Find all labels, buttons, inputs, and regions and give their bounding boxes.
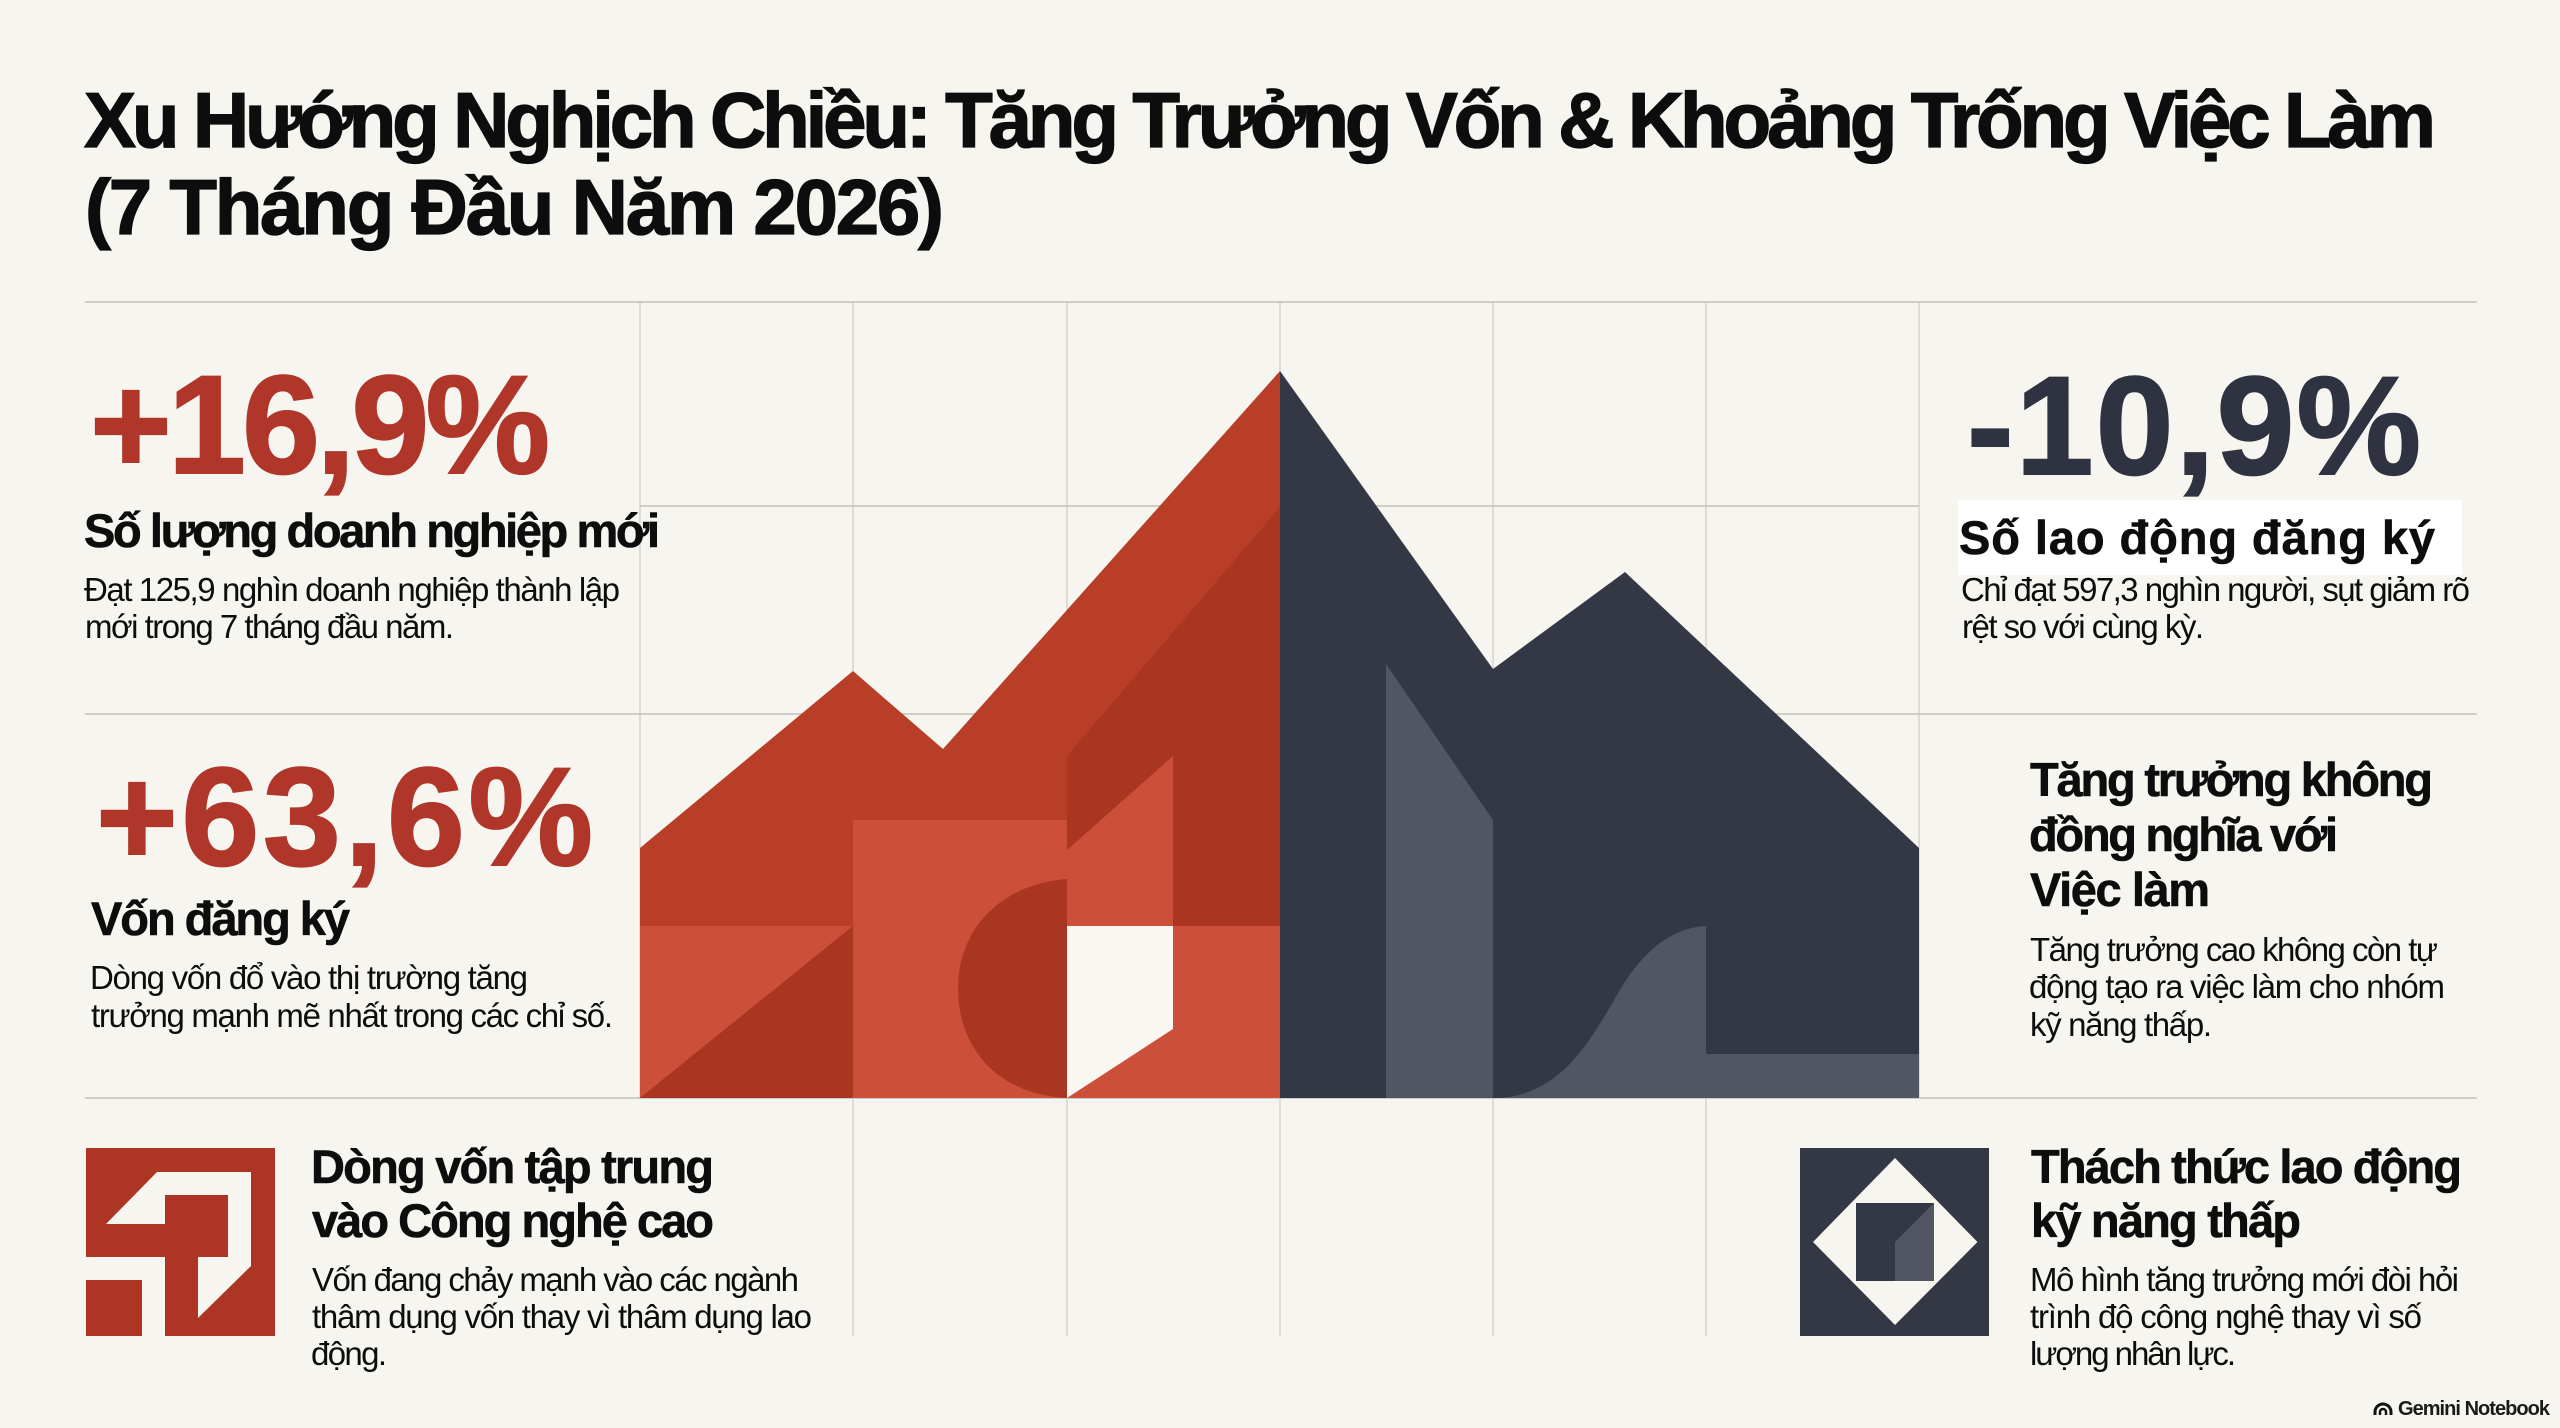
text: capital concentrated in high tech: Dòng vốn tập trung <box>311 1140 714 1193</box>
insight: growth without jobs: Tăng trưởng không <box>2030 753 2433 806</box>
text: capital concentrated in high tech: động. <box>311 1335 387 1372</box>
insight: growth without jobs: kỹ năng thấp. <box>2030 1006 2212 1043</box>
text: low-skill labour challenge: Mô hình tăng trưởng mới đòi hỏi <box>2030 1261 2459 1298</box>
stat: new enterprises: Số lượng doanh nghiệp mới <box>84 504 660 557</box>
stat: registered capital <box>90 738 613 1034</box>
title <box>84 76 2436 251</box>
stat: registered labour: Chỉ đạt 597,3 nghìn người, sụt giảm rõ <box>1961 571 2470 608</box>
text: capital concentrated in high tech <box>311 1140 812 1372</box>
stat: registered labour: rệt so với cùng kỳ. <box>1962 608 2204 645</box>
text: capital concentrated in high tech: vào Công nghệ cao <box>312 1194 714 1247</box>
central chart: mirrored mountain <box>640 371 1919 1098</box>
text: capital concentrated in high tech: thâm dụng vốn thay vì thâm dụng lao <box>312 1298 812 1335</box>
title: Xu Hướng Nghịch Chiều: Tăng Trưởng Vốn & Khoảng Trống Việc Làm <box>84 76 2436 164</box>
text: capital concentrated in high tech: Vốn đang chảy mạnh vào các ngành <box>312 1261 799 1298</box>
stat: registered capital: Vốn đăng ký <box>91 892 350 945</box>
stat: registered labour <box>1958 347 2470 645</box>
title: (7 Tháng Đầu Năm 2026) <box>85 163 944 251</box>
stat: registered capital: trưởng mạnh mẽ nhất trong các chỉ số. <box>91 997 613 1034</box>
insight: growth without jobs <box>2029 753 2445 1043</box>
icon: capital flow <box>86 1148 275 1336</box>
text: low-skill labour challenge: kỹ năng thấp <box>2031 1194 2301 1247</box>
stat: new enterprises: mới trong 7 tháng đầu năm. <box>85 608 454 645</box>
insight: growth without jobs: Tăng trưởng cao không còn tự <box>2030 931 2438 968</box>
stat: new enterprises: +16,9% <box>90 346 550 503</box>
stat: registered capital: +63,6% <box>96 738 593 895</box>
text: low-skill labour challenge: lượng nhân lực. <box>2030 1335 2236 1372</box>
stat: new enterprises <box>84 346 660 645</box>
stat: new enterprises: Đạt 125,9 nghìn doanh nghiệp thành lập <box>84 571 620 608</box>
red mountain: capital growth <box>640 371 1280 1098</box>
watermark: Gemini Notebook: Gemini Notebook <box>2398 1398 2551 1420</box>
text: low-skill labour challenge <box>2030 1140 2462 1372</box>
stat: registered labour: -10,9% <box>1967 347 2421 504</box>
stat: registered labour: Số lao động đăng ký <box>1959 511 2435 564</box>
icon: low-skill diamond <box>1800 1148 1989 1336</box>
navy mountain: labour decline <box>1280 371 1919 1098</box>
stat: registered capital: Dòng vốn đổ vào thị trường tăng <box>90 959 528 996</box>
insight: growth without jobs: đồng nghĩa với <box>2029 808 2338 861</box>
text: low-skill labour challenge: Thách thức lao động <box>2031 1140 2462 1193</box>
insight: growth without jobs: động tạo ra việc làm cho nhóm <box>2029 968 2445 1005</box>
text: low-skill labour challenge: trình độ công nghệ thay vì số <box>2030 1298 2422 1335</box>
insight: growth without jobs: Việc làm <box>2030 863 2210 916</box>
label patch <box>1958 500 2462 575</box>
